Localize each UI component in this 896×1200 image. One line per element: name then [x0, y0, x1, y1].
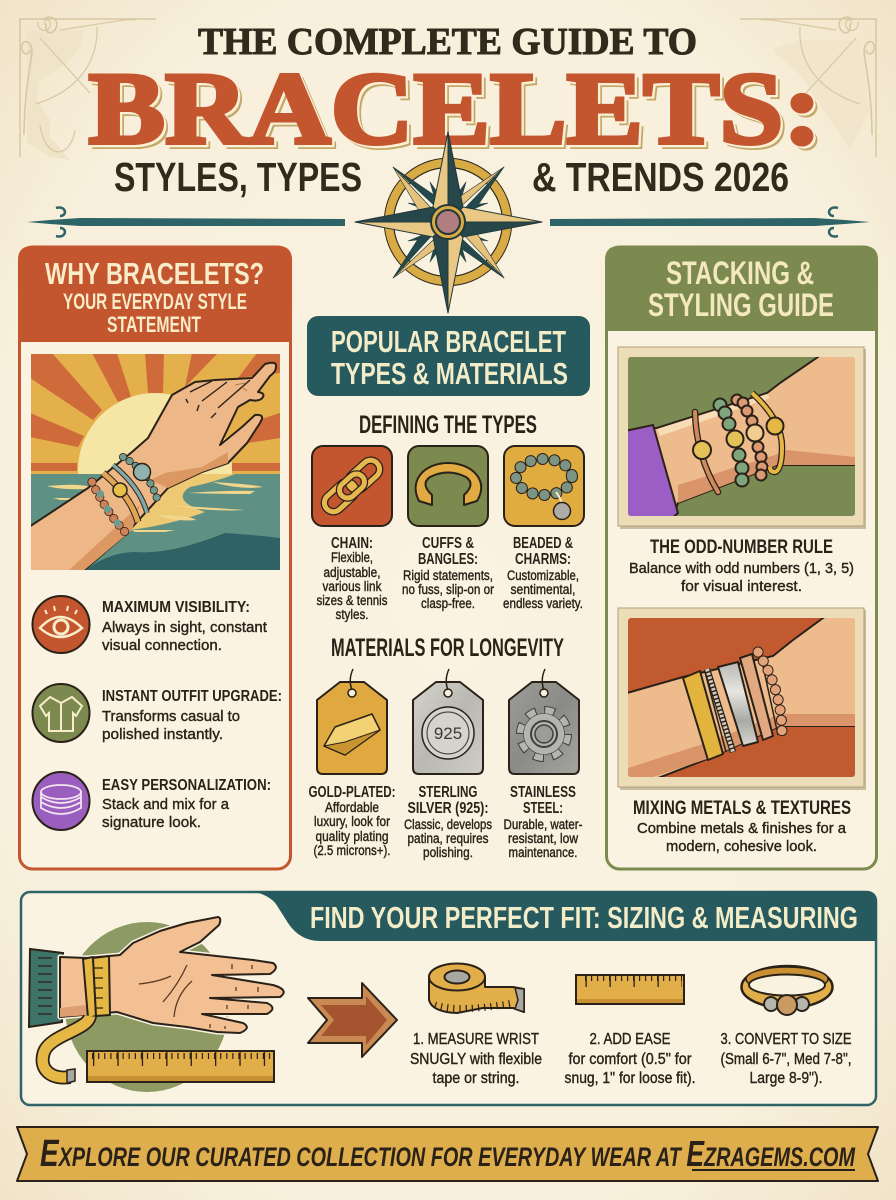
type: beaded and charms	[503, 446, 584, 611]
header: why bracelets: STATEMENT	[107, 312, 201, 337]
material: stainless steel: maintenance.	[508, 845, 578, 860]
decorative map corner right	[740, 17, 876, 157]
text: mixing metals and textures: modern, cohesive look.	[666, 838, 817, 855]
illustration: hand with measuring tape	[29, 917, 284, 1092]
type: cuffs and bangles	[402, 446, 494, 611]
material: stainless steel: STAINLESS	[510, 784, 576, 801]
arrow	[308, 983, 397, 1057]
material: gold-plated: quality plating	[316, 829, 388, 844]
material: stainless steel: Durable, water-	[504, 817, 582, 832]
item: instant outfit upgrade: INSTANT OUTFIT UPGRADE:	[102, 688, 282, 705]
type: cuffs and bangles: no fuss, slip-on or	[402, 582, 494, 597]
header: find your perfect fit	[250, 891, 877, 941]
illustration: wrist with bracelets at sunset	[20, 353, 280, 572]
icon: stacked bracelets	[32, 772, 90, 830]
panel: why bracelets	[18, 246, 292, 869]
panel: find your perfect fit	[21, 891, 877, 1105]
icon: silver tag	[413, 669, 483, 774]
icon: ruler	[576, 975, 684, 1004]
heading: defining the types: DEFINING THE TYPES	[359, 411, 537, 439]
item: instant outfit upgrade: polished instantly.	[102, 726, 223, 743]
type: cuffs and bangles: CUFFS &	[422, 535, 474, 552]
icon: silver tag: 925	[434, 724, 462, 743]
type: chain: CHAIN:	[331, 535, 373, 552]
header: popular bracelet types & materials: TYPES & MATERIALS	[331, 356, 568, 391]
item: easy personalization: signature look.	[102, 814, 201, 831]
decorative map corner left	[20, 17, 156, 160]
title	[88, 21, 826, 200]
step 3: convert to size: 3. CONVERT TO SIZE	[720, 1031, 852, 1048]
step 2: add ease: 2. ADD EASE	[590, 1031, 670, 1048]
text: mixing metals and textures: Combine metals & finishes for a	[637, 820, 847, 837]
text: the odd-number rule	[629, 537, 854, 595]
material: gold-plated: GOLD-PLATED:	[308, 784, 396, 801]
type: cuffs and bangles: clasp-free.	[421, 596, 475, 611]
item: easy personalization: EASY PERSONALIZATION:	[102, 777, 271, 794]
step 1: measure wrist: 1. MEASURE WRIST	[413, 1031, 539, 1048]
step 3: convert to size: (Small 6-7", Med 7-8",	[720, 1051, 852, 1068]
icon: beads	[504, 446, 584, 526]
subtitle left: STYLES, TYPES	[114, 154, 362, 200]
title line: the complete guide to: THE COMPLETE GUIDE TO	[198, 21, 697, 63]
panel: stacking and styling guide	[605, 246, 878, 869]
heading: materials for longevity: MATERIALS FOR LONGEVITY	[331, 634, 564, 662]
type: cuffs and bangles: Rigid statements,	[403, 568, 493, 583]
type: beaded and charms: BEADED &	[513, 535, 573, 552]
item: easy personalization: Stack and mix for a	[102, 796, 230, 813]
type: cuffs and bangles: BANGLES:	[418, 551, 478, 568]
type: chain: sizes & tennis	[316, 593, 388, 608]
text: the odd-number rule: Balance with odd numbers (1, 3, 5)	[629, 560, 854, 577]
icon: eye	[32, 596, 90, 653]
icon: measuring tape	[429, 964, 524, 1013]
material: stainless steel: STEEL:	[523, 800, 563, 817]
header: popular bracelet types & materials	[307, 316, 590, 396]
text: mixing metals and textures	[633, 798, 851, 855]
item: maximum visibility: Always in sight, constant	[102, 619, 268, 636]
subtitle right: & TRENDS 2026	[532, 154, 789, 200]
material: sterling silver: patina, requires	[408, 831, 489, 846]
item: instant outfit upgrade	[32, 684, 282, 743]
type: chain	[312, 446, 392, 622]
material: stainless steel: resistant, low	[508, 831, 578, 846]
step 2: add ease: snug, 1" for loose fit).	[564, 1070, 696, 1087]
illustration: odd-number rule	[618, 340, 870, 529]
material: sterling silver: SILVER (925):	[408, 800, 488, 817]
type: beaded and charms: CHARMS:	[515, 551, 571, 568]
icon: steel tag	[509, 669, 579, 774]
header: why bracelets	[18, 246, 292, 342]
banner: call to action: EXPLORE OUR CURATED COLLECTION FOR EVERYDAY WEAR AT EZRAGEMS.COM	[40, 1133, 855, 1175]
step 2: add ease: for comfort (0.5" for	[568, 1051, 692, 1068]
item: maximum visibility: visual connection.	[102, 637, 222, 654]
title line: bracelets: BRACELETS:	[88, 52, 822, 166]
header: why bracelets: WHY BRACELETS?	[45, 256, 264, 291]
step 3: convert to size	[720, 966, 852, 1087]
item: maximum visibility	[32, 596, 268, 654]
type: chain: various link	[322, 579, 382, 594]
text: the odd-number rule: for visual interest.	[681, 578, 802, 595]
material: sterling silver: Classic, develops	[404, 817, 492, 832]
header: stacking and styling guide	[605, 246, 878, 331]
step 1: measure wrist: tape or string.	[432, 1070, 520, 1087]
header: stacking and styling guide: STACKING &	[666, 255, 814, 291]
step 1: measure wrist: SNUGLY with flexible	[410, 1051, 542, 1068]
type: beaded and charms: endless variety.	[503, 596, 583, 611]
type: chain: adjustable,	[324, 565, 380, 580]
type: beaded and charms: Customizable,	[507, 568, 579, 583]
item: easy personalization	[32, 772, 271, 831]
header: why bracelets: YOUR EVERYDAY STYLE	[63, 289, 247, 314]
step 3: convert to size: Large 8-9").	[750, 1070, 822, 1087]
icon: gold tag	[317, 669, 387, 774]
header: popular bracelet types & materials: POPULAR BRACELET	[331, 324, 566, 359]
illustration: mixing metals	[618, 600, 870, 790]
compass rose	[355, 132, 542, 313]
divider arrow left	[27, 207, 345, 237]
title line: bracelets: BRACELETS:	[90, 54, 824, 168]
material: stainless steel	[504, 669, 582, 860]
item: instant outfit upgrade: Transforms casual to	[102, 708, 240, 725]
icon: cuff	[408, 446, 488, 526]
material: gold-plated: (2.5 microns+).	[314, 843, 390, 858]
icon: shirt	[32, 684, 90, 742]
icon: chain	[312, 446, 392, 526]
material: gold-plated	[308, 669, 396, 858]
item: maximum visibility: MAXIMUM VISIBILITY:	[102, 599, 250, 616]
divider arrow right	[550, 207, 870, 237]
type: chain: styles.	[336, 607, 368, 622]
material: gold-plated: luxury, look for	[314, 814, 390, 829]
icon: ring	[742, 966, 832, 1015]
material: gold-plated: Affordable	[325, 800, 379, 815]
material: sterling silver: STERLING	[418, 784, 478, 801]
type: chain: Flexible,	[331, 550, 373, 565]
step 1: measure wrist	[410, 964, 542, 1087]
step 2: add ease	[564, 975, 696, 1087]
ruler	[87, 1051, 274, 1082]
material: sterling silver: polishing.	[423, 845, 473, 860]
type: beaded and charms: sentimental,	[510, 582, 576, 597]
title line: bracelets: BRACELETS:	[92, 56, 826, 170]
panel: popular bracelet types	[307, 316, 590, 860]
header: stacking and styling guide: STYLING GUIDE	[648, 287, 834, 323]
text: the odd-number rule: THE ODD-NUMBER RULE	[650, 537, 833, 558]
material: sterling silver	[404, 669, 492, 860]
